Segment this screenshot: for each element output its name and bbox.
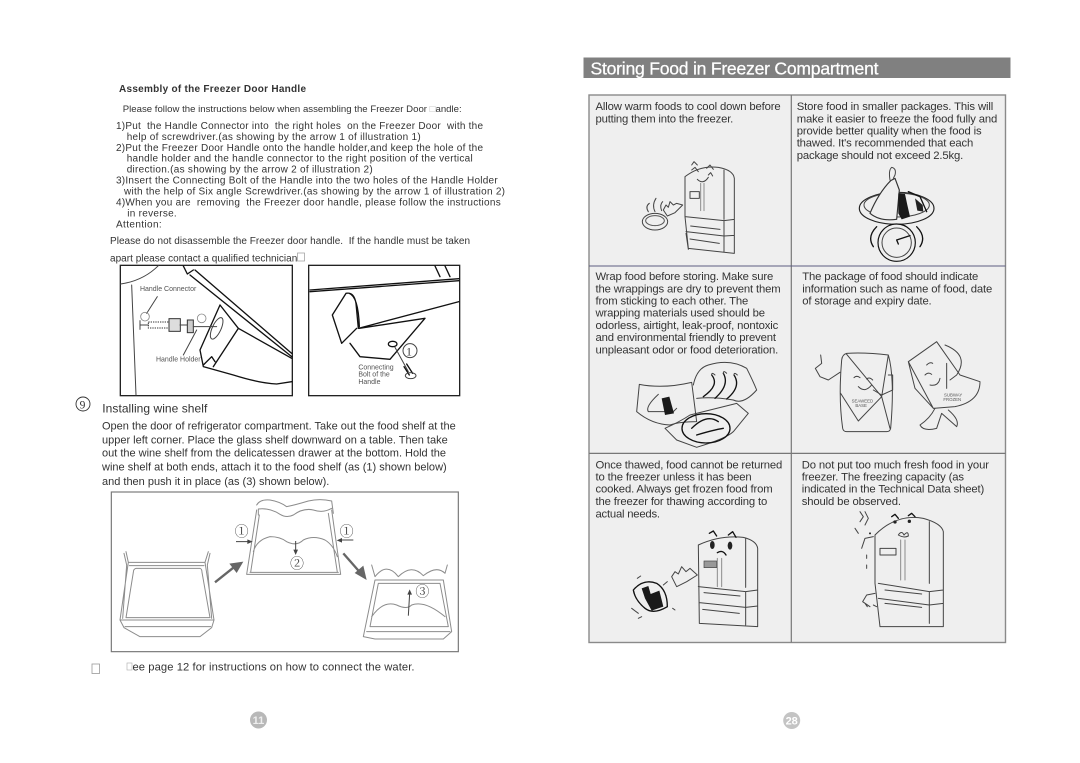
tip: smaller packages: provide better quality when the food is [797, 125, 982, 137]
wine shelf held upright [247, 500, 341, 574]
tip: cool warm foods: Allow warm foods to cool down before [596, 101, 781, 113]
tip: wrap food: wrapping materials used should be [594, 308, 765, 320]
text block: attention note: Please do not disassemble the Freezer door handle. If the handle must be taken [110, 236, 470, 247]
illustration 2: connecting bolt of the handle [309, 265, 460, 396]
page number 11 [250, 712, 267, 728]
tip: smaller packages: package should not exceed 2.5kg. [797, 150, 963, 162]
text block: assembly steps: with the help of Six angle Screwdriver.(as showing by the arrow 1 of illustration 2) [123, 186, 505, 197]
tip: do not refreeze: to the freezer unless it has been [596, 472, 752, 484]
tip: smaller packages: thawed. It's recommended that each [797, 138, 973, 150]
food shelf [120, 552, 214, 637]
tip: do not refreeze [596, 459, 782, 520]
step numbers [235, 525, 429, 601]
text block: wine shelf instructions [101, 420, 456, 488]
tip: wrap food [594, 271, 781, 356]
text block: attention note [110, 236, 470, 264]
tip: freezing capacity: Do not put too much fresh food in your [802, 459, 989, 471]
tip: label the package: information such as name of food, date [802, 283, 992, 295]
tip: do not refreeze: the freezer for thawing according to [596, 496, 767, 508]
text block: wine shelf instructions: Open the door of refrigerator compartment. Take out the food shelf at the [102, 420, 456, 432]
tip: smaller packages [797, 101, 997, 162]
tip: smaller packages: Store food in smaller packages. This will [797, 101, 993, 113]
icon: wrapped food bags [637, 362, 757, 447]
icon: smiling food packages: FROZEN [943, 397, 961, 402]
text block: assembly steps: 4)When you are removing the Freezer door handle, please follow the instructions [116, 198, 501, 209]
tip: do not refreeze: actual needs. [596, 508, 660, 520]
icon: smiling food packages [815, 342, 980, 432]
text block: assembly steps: help of screwdriver.(as showing by the arrow 1 of illustration 1) [127, 132, 421, 143]
icon: circled number 9: 9 [80, 400, 86, 412]
tip: wrap food: from sticking to each other. The [596, 295, 748, 307]
arrows [215, 568, 233, 582]
tip: wrap food: and environmental friendly to prevent [596, 332, 777, 344]
icon: refrigerator rejecting thawed food [632, 531, 758, 627]
page number 28 [783, 712, 800, 729]
title banner: storing food in freezer compartment: Storing Food in Freezer Compartment [590, 58, 879, 78]
tip: wrap food: the wrappings are dry to prevent them [596, 283, 781, 295]
illustration 2: connecting bolt of the handle: Bolt of the [358, 372, 390, 379]
text block: wine shelf instructions: upper left corner. Place the glass shelf downward on a table. Then take [102, 434, 448, 446]
icon: smiling food packages: BASE [855, 403, 867, 408]
wine shelf in place [363, 565, 452, 639]
panel: food storage tips table [589, 95, 1006, 642]
tip: wrap food: Wrap food before storing. Make sure [596, 271, 773, 283]
tip: label the package: of storage and expiry date. [802, 295, 932, 307]
text block: wine shelf instructions: wine shelf at both ends, attach it to the food shelf (as (1) shown below) [101, 462, 447, 474]
illustration: wine shelf installation steps [111, 492, 458, 652]
text block: wine shelf instructions: and then push it in place (as (3) shown below). [102, 476, 329, 488]
footnote: connecting the water: ee page 12 for instructions on how to connect the water. [132, 662, 414, 674]
icon: circled number 9 [76, 397, 90, 412]
text block: assembly introduction: Please follow the instructions below when assembling the Freezer Door □andle: [123, 104, 462, 115]
tip: freezing capacity: indicated in the Technical Data sheet) [802, 484, 985, 496]
tip: wrap food: unpleasant odor or food deterioration. [596, 344, 778, 356]
heading: installing wine shelf: Installing wine shelf [102, 402, 208, 416]
text block: wine shelf instructions: out the wine shelf from the delicatessen drawer at the bottom. Hold the [102, 448, 446, 460]
illustration 2: connecting bolt of the handle: Connecting [358, 364, 394, 371]
text block: assembly steps: Attention: [116, 219, 162, 230]
text block: assembly steps: 1)Put the Handle Connector into the right holes on the Freezer Door with the [116, 121, 483, 132]
page number 28: 28 [786, 716, 798, 728]
icon: smiling food packages: SEAWEED [852, 398, 873, 403]
title banner: storing food in freezer compartment [584, 58, 1010, 78]
text block: assembly steps [116, 121, 505, 230]
illustration 1: handle connector and holder: Handle Connector [140, 286, 197, 293]
tip: freezing capacity: freezer. The freezing capacity (as [802, 472, 964, 484]
text block: assembly steps: handle holder and the handle connector to the right position of the vertical [127, 154, 473, 165]
tip: label the package [802, 271, 992, 307]
icon: smiling food packages: SUBWAY [944, 393, 962, 398]
text block: assembly steps: direction.(as showing by the arrow 2 of illustration 2) [127, 165, 373, 176]
icon: food on kitchen scale [859, 167, 934, 261]
tip: cool warm foods [596, 101, 781, 125]
illustration 2: connecting bolt of the handle: Handle [358, 379, 381, 386]
step numbers: ③ [415, 585, 429, 601]
tip: wrap food: odorless, airtight, leak-proof, nontoxic [596, 320, 779, 332]
icon: steaming bowl by refrigerator [642, 162, 734, 253]
illustration 1: handle connector and holder: Handle Holder [156, 356, 201, 363]
icon: overfilled refrigerator [855, 512, 943, 627]
text block: attention note: apart please contact a qualified technician [110, 253, 297, 264]
step numbers: ① [235, 525, 249, 541]
tip: label the package: The package of food should indicate [802, 271, 978, 283]
tip: smaller packages: make it easier to freeze the food fully and [797, 113, 997, 125]
text block: assembly steps: 3)Insert the Connecting Bolt of the Handle into the two holes of the Handle Holder [116, 176, 498, 187]
step numbers: ① [340, 525, 354, 541]
step numbers: ② [290, 556, 304, 572]
text block: assembly steps: 2)Put the Freezer Door Handle onto the handle holder,and keep the hole of the [116, 143, 483, 154]
tip: cool warm foods: putting them into the freezer. [596, 113, 733, 125]
tip: freezing capacity [802, 459, 989, 508]
illustration 2: connecting bolt of the handle: 1 [406, 345, 412, 359]
text block: assembly steps: in reverse. [127, 209, 177, 220]
page number 11: 11 [253, 715, 264, 727]
tip: freezing capacity: should be observed. [802, 496, 901, 508]
tip: do not refreeze: cooked. Always get frozen food from [596, 484, 773, 496]
heading: assembly of the freezer door handle: Assembly of the Freezer Door Handle [119, 84, 306, 95]
tip: do not refreeze: Once thawed, food cannot be returned [596, 459, 782, 471]
illustration 1: handle connector and holder [120, 265, 292, 396]
